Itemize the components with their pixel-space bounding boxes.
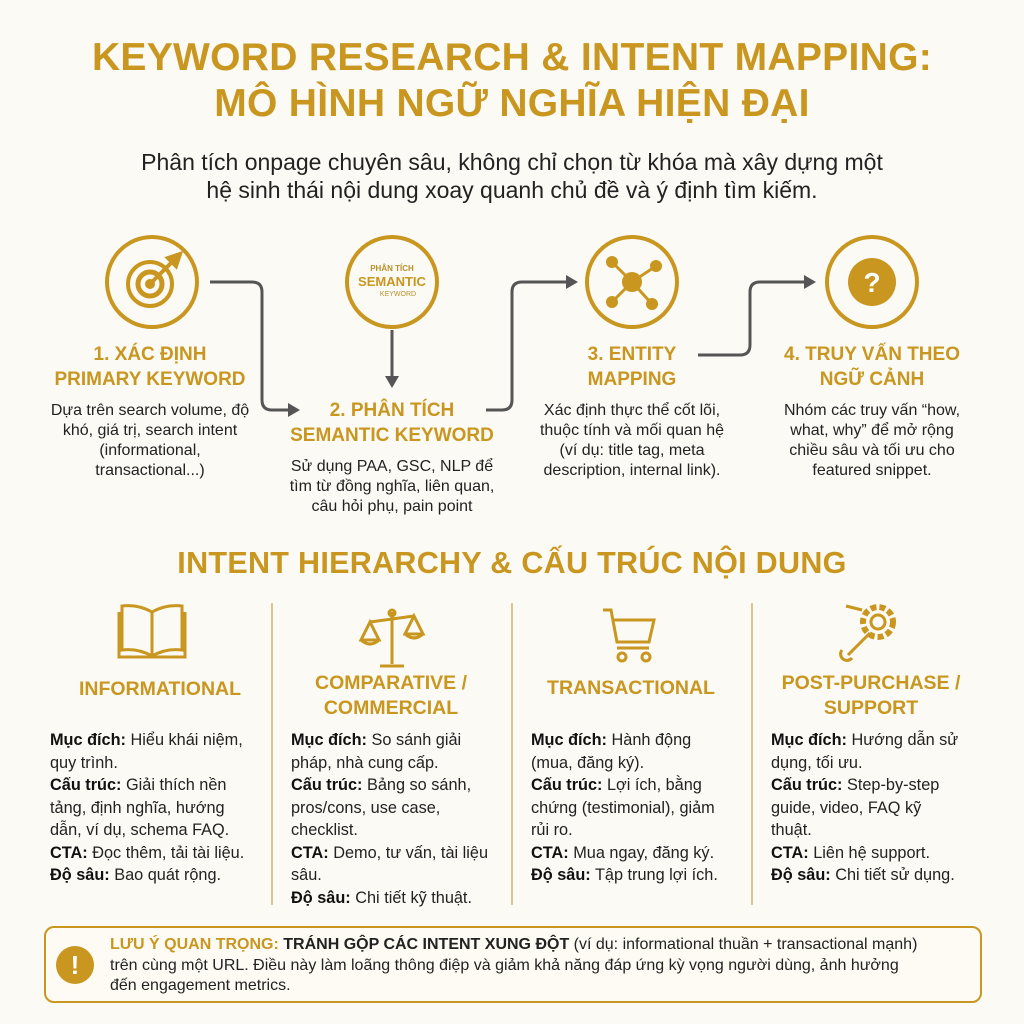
column: transactional: Cấu trúc: Lợi ích, bằng [531,776,702,794]
step 1: transactional...) [95,462,205,479]
column: comparative: Cấu trúc: Bảng so sánh, [291,776,471,794]
icon: semantic word cloud [347,237,437,327]
step 1: 1. XÁC ĐỊNH [94,344,206,365]
step 4: chiều sâu và tối ưu cho [789,442,955,459]
step 3 [540,344,724,479]
subtitle: Phân tích onpage chuyên sâu, không chỉ chọn từ khóa mà xây dựng một [141,149,883,175]
column: informational: quy trình. [50,754,118,772]
column: informational: Mục đích: Hiểu khái niệm, [50,731,243,749]
column: post-purchase: dụng, tối ưu. [771,754,862,772]
column: post-purchase: Mục đích: Hướng dẫn sử [771,731,958,749]
step 3: 3. ENTITY [588,344,676,365]
icon: question: ? [863,267,881,298]
title: KEYWORD RESEARCH & INTENT MAPPING: [92,36,932,79]
column: informational: INFORMATIONAL [79,678,241,700]
icon: entity network [587,237,677,327]
column: post-purchase: thuật. [771,821,812,839]
step 2: SEMANTIC KEYWORD [290,425,494,446]
column: comparative: checklist. [291,821,358,839]
icon: cart [603,610,654,661]
step 4 [784,342,960,479]
column: transactional: Độ sâu: Tập trung lợi ích. [531,866,718,884]
column: comparative: CTA: Demo, tư vấn, tài liệu [291,844,488,862]
callout text: LƯU Ý QUAN TRỌNG: TRÁNH GỘP CÁC INTENT XUNG ĐỘT (ví dụ: informational thuần + transactional mạnh) [110,936,917,953]
column: informational: Độ sâu: Bao quát rộng. [50,866,221,884]
icon: warning: ! [71,950,79,980]
column: transactional: CTA: Mua ngay, đăng ký. [531,844,714,862]
step 1: khó, giá trị, search intent [63,422,237,439]
column: comparative: Mục đích: So sánh giải [291,731,461,749]
icon: scales [361,610,423,666]
column: comparative: Độ sâu: Chi tiết kỹ thuật. [291,888,472,906]
column: comparative: pros/cons, use case, [291,798,440,816]
section heading: INTENT HIERARCHY & CẤU TRÚC NỘI DUNG [177,546,847,580]
step 1: Dựa trên search volume, độ [51,402,249,419]
column: post-purchase [771,672,960,884]
column: comparative: COMMERCIAL [324,697,458,719]
column: comparative: COMPARATIVE / [315,672,467,694]
column: transactional: Mục đích: Hành động [531,731,691,749]
column: post-purchase: Cấu trúc: Step-by-step [771,776,939,794]
column: post-purchase: CTA: Liên hệ support. [771,844,930,862]
step 3: Xác định thực thể cốt lõi, [544,402,720,419]
column: post-purchase: guide, video, FAQ kỹ [771,798,921,816]
column: informational: CTA: Đọc thêm, tải tài liệu. [50,844,244,862]
icon: semantic word cloud: KEYWORD [380,291,416,298]
column: informational: dẫn, ví dụ, schema FAQ. [50,821,229,839]
step 2 [290,398,494,515]
callout text: đến engagement metrics. [110,977,291,994]
callout: important note [44,926,982,1003]
step 4: featured snippet. [812,462,932,479]
column: comparative: pháp, nhà cung cấp. [291,754,439,772]
step 3: (ví dụ: title tag, meta [560,442,704,459]
step 1: PRIMARY KEYWORD [54,369,246,390]
subtitle: hệ sinh thái nội dung xoay quanh chủ đề và ý định tìm kiếm. [206,177,818,203]
column: transactional [531,677,718,884]
icon: book [119,606,185,657]
process diagram [105,235,919,417]
step 2: 2. PHÂN TÍCH [330,400,454,421]
step 3: thuộc tính và mối quan hệ [540,422,724,439]
column: transactional: rủi ro. [531,821,573,839]
icon: warning [56,946,94,984]
icon: semantic word cloud: SEMANTIC [358,274,427,289]
step 4: NGỮ CẢNH [820,369,924,390]
step 4: what, why” để mở rộng [790,422,954,439]
title: MÔ HÌNH NGỮ NGHĨA HIỆN ĐẠI [214,82,810,125]
icon: target [107,237,197,327]
step 2: Sử dụng PAA, GSC, NLP để [291,458,493,475]
column: comparative [291,672,488,906]
step 4: 4. TRUY VẤN THEO [784,344,960,365]
column: post-purchase: SUPPORT [824,697,918,719]
column: informational: tảng, định nghĩa, hướng [50,798,225,816]
column icons [118,604,896,668]
step 4: Nhóm các truy vấn “how, [784,402,960,419]
column: informational: Cấu trúc: Giải thích nền [50,776,226,794]
column: informational [50,678,244,884]
icon: semantic word cloud: PHÂN TÍCH [370,264,414,273]
column: transactional: chứng (testimonial), giảm [531,798,715,816]
icon: question [827,237,917,327]
column: comparative: sâu. [291,866,322,884]
step 2: tìm từ đồng nghĩa, liên quan, [290,478,494,495]
column: transactional: TRANSACTIONAL [547,677,715,699]
step 3: MAPPING [588,369,676,390]
column: transactional: (mua, đăng ký). [531,754,644,772]
step 1: (informational, [99,442,201,459]
column: post-purchase: POST-PURCHASE / [782,672,960,694]
callout text [110,934,917,994]
icon: gear and wrench [841,606,893,660]
step 3: description, internal link). [544,462,720,479]
subtitle [141,149,883,203]
step 1 [51,342,249,479]
callout text: trên cùng một URL. Điều này làm loãng thông điệp và giảm khả năng đáp ứng kỳ vọng người dùng, ảnh hưởng [110,956,899,974]
column: post-purchase: Độ sâu: Chi tiết sử dụng. [771,866,955,884]
title [92,36,932,125]
step 2: câu hỏi phụ, pain point [311,498,472,515]
arrows [210,282,808,410]
